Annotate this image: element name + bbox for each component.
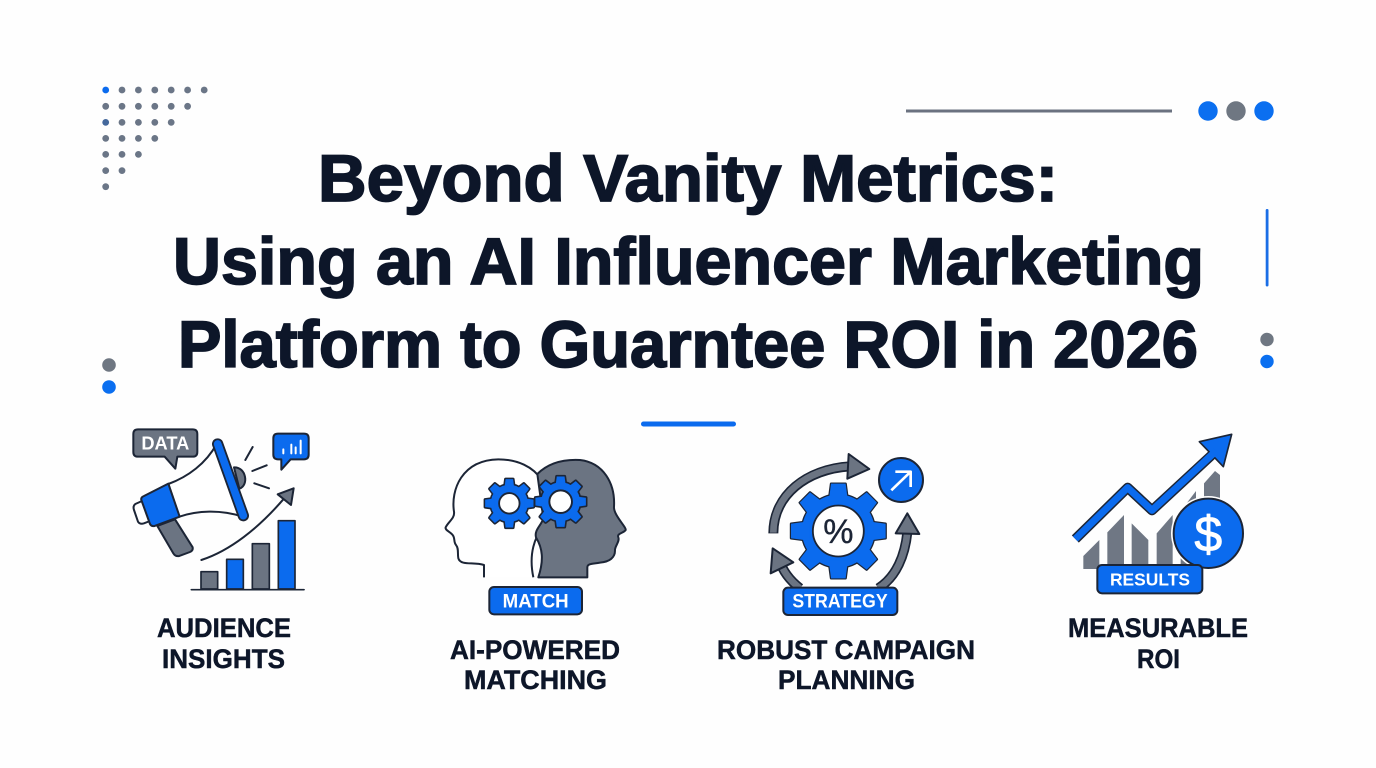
- trend arrow: [1075, 434, 1232, 539]
- label: audience insights: AUDIENCE: [157, 613, 291, 643]
- cycle arrows: [771, 454, 919, 588]
- arrow circle: [879, 458, 923, 502]
- growth arrow: [201, 488, 294, 560]
- bar chart: [191, 521, 304, 590]
- label: measurable roi: ROI: [1137, 644, 1180, 674]
- decorative dot triangle, top left: [102, 87, 208, 190]
- title underline accent: [641, 422, 736, 426]
- label: ai-powered matching: [450, 635, 620, 695]
- title: Using an AI Influencer Marketing: [173, 224, 1204, 298]
- label: robust campaign planning: [717, 635, 975, 695]
- label: measurable roi: MEASURABLE: [1068, 613, 1248, 643]
- left white head: [446, 459, 543, 577]
- right grey head: [536, 460, 626, 577]
- gear with percent: %: [823, 513, 853, 551]
- strategy badge: [783, 588, 897, 615]
- label: robust campaign planning: ROBUST CAMPAIGN: [717, 635, 975, 665]
- label: audience insights: [157, 613, 291, 674]
- dollar coin: $: [1194, 506, 1222, 562]
- grey bars: [1083, 471, 1220, 569]
- results badge: [1097, 565, 1202, 593]
- results badge: RESULTS: [1110, 570, 1190, 590]
- label: audience insights: INSIGHTS: [162, 644, 285, 674]
- gear with percent: [791, 484, 886, 578]
- data speech bubble: [133, 429, 197, 469]
- mini chart speech bubble: [273, 434, 309, 470]
- title: [173, 141, 1204, 381]
- strategy badge: STRATEGY: [792, 592, 888, 613]
- label: robust campaign planning: PLANNING: [778, 665, 915, 695]
- icon: megaphone with data and bar chart: [133, 429, 309, 590]
- label: ai-powered matching: MATCHING: [464, 665, 607, 695]
- title: Beyond Vanity Metrics:: [318, 141, 1058, 215]
- icon: gear with cycle arrows: [771, 454, 923, 615]
- data speech bubble: DATA: [141, 433, 189, 454]
- title: Platform to Guarntee ROI in 2026: [178, 307, 1198, 381]
- left gear: [485, 479, 534, 528]
- right gear: [535, 476, 586, 527]
- decorative line and three dots, top right: [906, 101, 1274, 121]
- icon: growth chart with dollar coin: [1075, 434, 1246, 593]
- sound lines: [245, 447, 269, 488]
- decorative vertical line and dots, right: [1260, 209, 1274, 368]
- match badge: [489, 587, 582, 614]
- icon: two heads with gears: [446, 459, 626, 614]
- match badge: MATCH: [503, 592, 569, 613]
- label: measurable roi: [1068, 613, 1248, 674]
- dollar coin: [1171, 496, 1246, 571]
- decorative dots, left: [102, 358, 116, 394]
- label: ai-powered matching: AI-POWERED: [450, 635, 620, 665]
- megaphone: [134, 444, 245, 556]
